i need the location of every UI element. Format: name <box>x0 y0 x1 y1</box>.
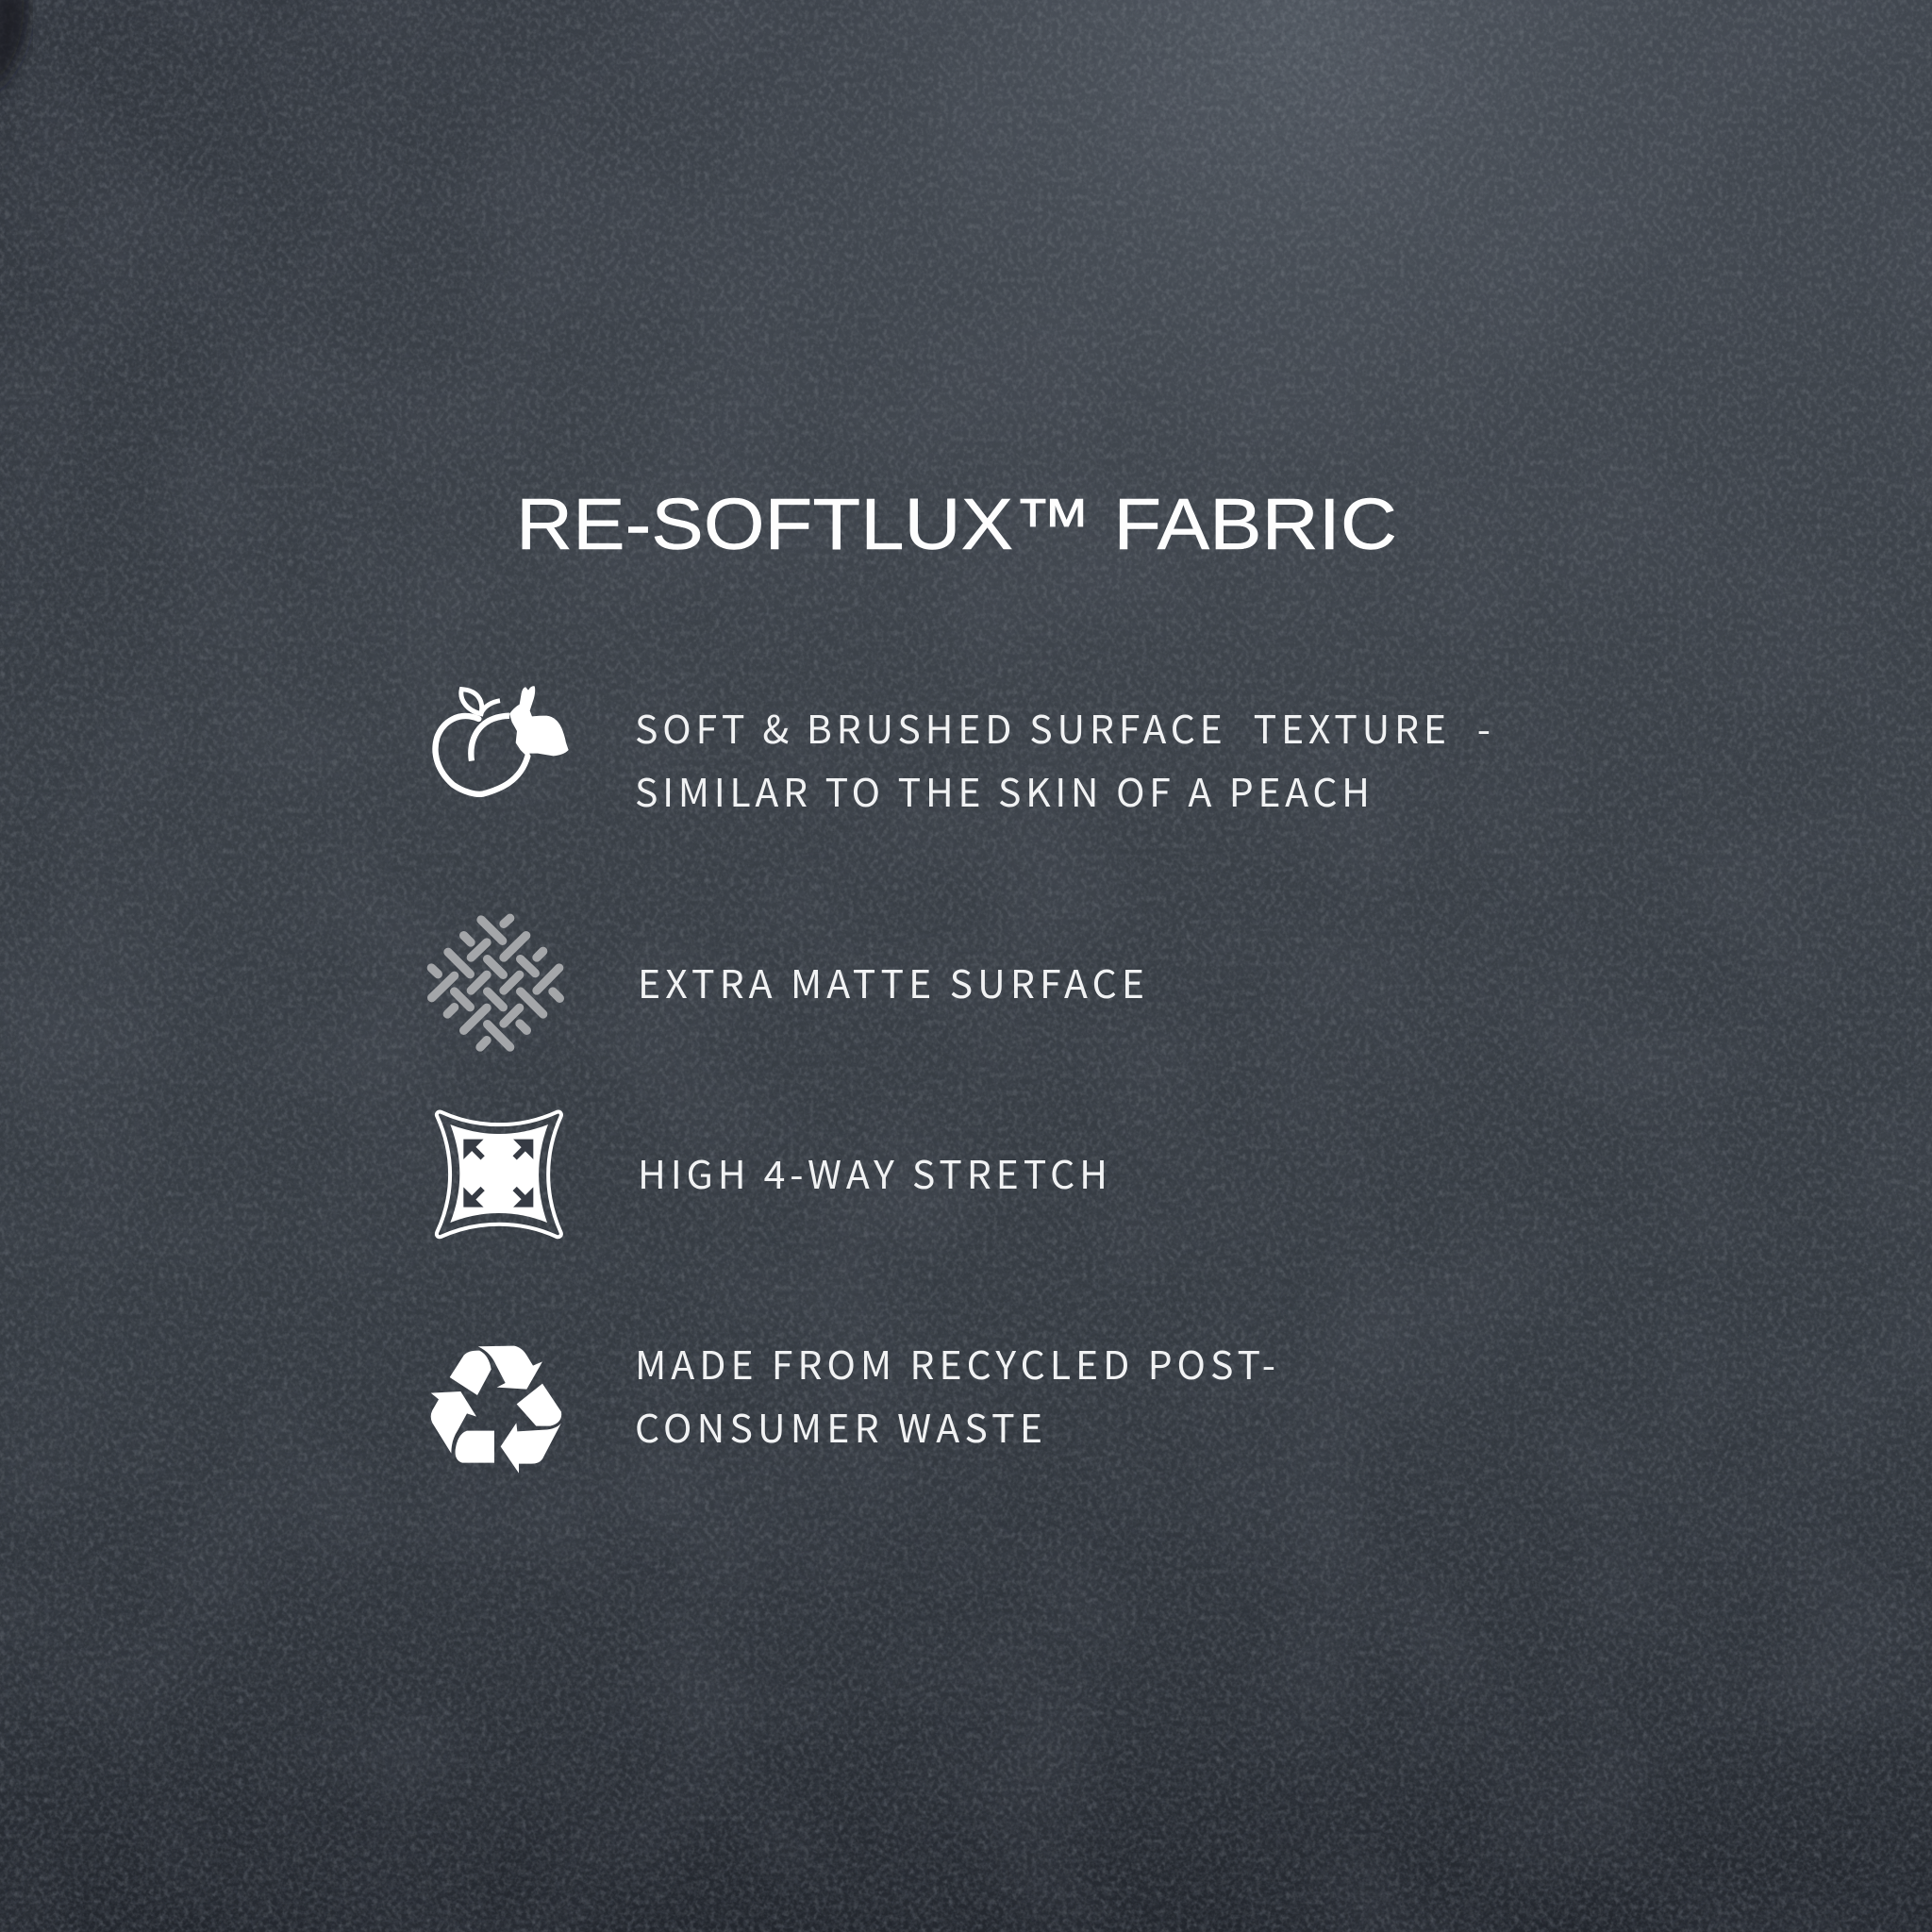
icon: peach and rabbit <box>435 686 569 794</box>
icon: recycle <box>431 1346 561 1474</box>
text: soft and brushed surface: SIMILAR TO THE SKIN OF A PEACH <box>635 761 1370 818</box>
text: soft and brushed surface: SOFT & BRUSHED SURFACE TEXTURE - <box>635 698 1491 755</box>
icon: woven matte surface <box>431 918 559 1047</box>
text: made from recycled post-consumer waste <box>635 1334 1275 1454</box>
text: made from recycled post-consumer waste: CONSUMER WASTE <box>635 1397 1042 1454</box>
text: made from recycled post-consumer waste: MADE FROM RECYCLED POST- <box>635 1334 1275 1391</box>
text: extra matte surface: EXTRA MATTE SURFACE <box>638 953 1144 1009</box>
icon: four-way stretch <box>437 1112 561 1237</box>
title: RE-SOFTLUX™ FABRIC <box>516 484 1397 565</box>
text: high 4-way stretch: HIGH 4-WAY STRETCH <box>638 1143 1108 1200</box>
text: soft and brushed surface <box>635 698 1491 818</box>
